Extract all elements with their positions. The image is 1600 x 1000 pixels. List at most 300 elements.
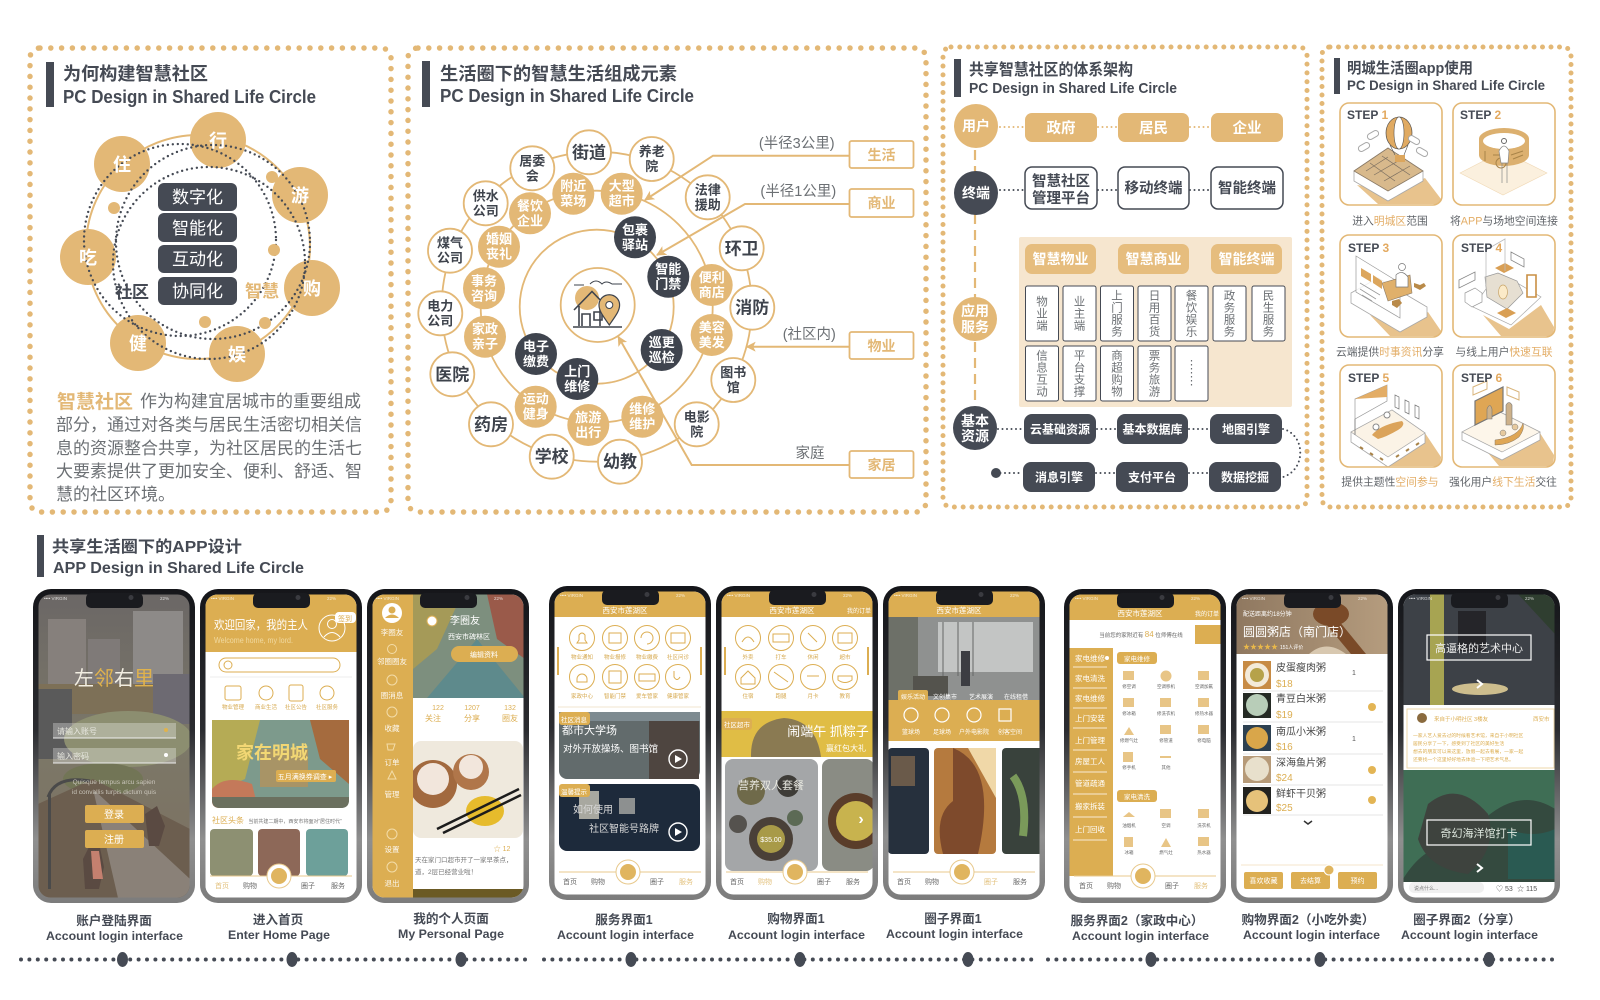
phone 8: shopping page 2: 去结算 [1300, 876, 1321, 885]
middle ring services: 出行 [575, 425, 601, 440]
phone 6: circle page 1 [883, 586, 1045, 900]
comment card: 来自于小明社区 3楼友 [1434, 715, 1489, 723]
arrows and labels: service categories: (半径1公里) [760, 183, 836, 200]
food menu list: $16 [1276, 742, 1293, 753]
service tags and icons: 其他 [1162, 764, 1171, 771]
phone 9: circle page 2: ♡ 53 [1496, 885, 1513, 893]
application services block [953, 244, 1285, 401]
heading: smart life elements [422, 61, 694, 107]
outer ring services: 药房 [474, 415, 508, 434]
diagram: seven elements ring: 住 [113, 155, 131, 175]
service tags and icons: 修热水器 [1195, 710, 1213, 717]
diagram: seven elements ring: 游 [291, 185, 309, 206]
middle ring services: 咨询 [471, 288, 497, 303]
phone 3: personal page: 管理 [384, 789, 400, 799]
phone 7: service page 2: 首页 [1079, 881, 1093, 890]
comment card: 西安市 [1533, 715, 1550, 723]
phone 8: shopping page 2: 喜欢收藏 [1250, 876, 1278, 885]
text block: smart community description: 作为构建宜居城市的重要组成 [140, 392, 361, 411]
heading: system architecture: PC Design in Shared Life Circle [969, 80, 1177, 97]
application services block: 娱 [1186, 312, 1198, 326]
step 6 card [1453, 365, 1555, 467]
service tags and icons: 冰箱 [1124, 849, 1134, 856]
phone 6: circle page 1: 艺术展演 [969, 693, 993, 701]
application services block: 物 [1036, 294, 1048, 308]
application services block: 餐 [1186, 288, 1198, 302]
heading: app usage: 明城生活圈app使用 [1347, 59, 1473, 77]
phone captions: 账户登陆界面 [76, 913, 152, 928]
phone 2: home page: Welcome home, my lord. [214, 636, 293, 645]
outer ring services: 幼教 [603, 453, 637, 472]
heading: why smart community: PC Design in Shared Life Circle [63, 87, 316, 107]
inner ring services: 维修 [564, 379, 590, 394]
phone 3: personal page: 天在家门口超市开了一家早茶点， [415, 855, 512, 864]
step captions: 与线上用户快速互联 [1455, 345, 1553, 359]
application services block: 游 [1149, 386, 1161, 398]
service tags and icons: 家电维修 [1124, 654, 1150, 663]
phone 7: service page 2: 圈子 [1165, 882, 1179, 890]
icon grid: 健康管家 [667, 692, 689, 700]
icon grid: 住宿 [742, 692, 754, 700]
phone 2: home page: 22% [327, 596, 336, 601]
phone 4: service page 1: 圈子 [650, 878, 664, 886]
inner ring services: 门禁 [655, 277, 681, 292]
phone 5: shopping page 1: •••• VIRGIN [727, 593, 750, 598]
middle ring services: 美发 [699, 335, 725, 350]
application services block: 业 [1036, 308, 1048, 320]
text block: smart community description: 大要素提供了更加安全、便利、舒适、智 [56, 462, 362, 481]
step captions: 将APP与场地空间连接 [1450, 214, 1558, 228]
phone 3: personal page: 1207 [464, 705, 480, 712]
phone 2: home page: 当前共建二期中，西安市将面对“居住时代” [248, 818, 342, 825]
phone 7: service page 2: 购物 [1107, 881, 1121, 890]
application services block: 政 [1224, 288, 1236, 302]
phone 7: service page 2: 搬家拆装 [1075, 801, 1105, 811]
phone 7: service page 2: 家电清洗 [1075, 673, 1105, 683]
food menu list [1243, 661, 1383, 824]
phone 1: login screen: 登录 [104, 808, 124, 821]
step 3 card: STEP 3 [1348, 241, 1389, 255]
text block: smart community description: 部分，通过对各类与居民生活密切相关信 [56, 416, 362, 434]
phone 4: service page 1 [549, 586, 711, 900]
bottom nav [210, 875, 352, 877]
icon grid: 物业通知 [571, 653, 593, 661]
inner ring services [515, 216, 689, 400]
phone 6: circle page 1: 户外电影院 [959, 728, 989, 736]
outer ring services: 医院 [435, 364, 469, 384]
step 1 card: STEP 1 [1347, 108, 1388, 122]
middle ring services: 维修 [629, 402, 655, 417]
phone 7: service page 2: 我的订单 [1195, 610, 1219, 618]
phone 1: login screen: Quisque tempus arcu sapien [73, 779, 156, 786]
phone captions: My Personal Page [398, 929, 504, 941]
phone 6: circle page 1: 服务 [1013, 877, 1027, 886]
phone 9: circle page 2: 奇幻海洋馆打卡 [1440, 826, 1518, 840]
phone captions: 我的个人页面 [413, 911, 489, 926]
phone 7: service page 2: 服务 [1194, 881, 1208, 890]
middle ring services: 大型 [609, 179, 635, 194]
application services block: 乐 [1186, 326, 1198, 338]
step 4 card [1453, 235, 1555, 337]
phone 4: service page 1: 购物 [591, 877, 605, 886]
phone 4: service page 1: 西安市莲湖区 [602, 605, 648, 615]
phone 2: home page [200, 589, 362, 903]
icon row [222, 685, 338, 711]
phone 3: personal page: 关注 [425, 713, 441, 723]
service tags and icons: 修电脑 [1197, 737, 1211, 744]
phone captions: Account login interface [1401, 930, 1538, 942]
outer ring services: 养老 [639, 144, 665, 159]
middle ring services: 运动 [523, 392, 549, 407]
phone 4: service page 1: 22% [676, 593, 685, 598]
phone 7: service page 2: 家电维修 [1075, 653, 1105, 663]
diagram: seven elements ring: 健 [129, 334, 147, 354]
diagram: seven elements ring: 行 [209, 131, 227, 151]
application services block: 信 [1036, 350, 1048, 362]
service tags and icons: 空调 [1162, 822, 1171, 829]
application services block: 货 [1149, 324, 1160, 338]
panel: system architecture [943, 47, 1307, 507]
phone captions: Account login interface [728, 930, 865, 942]
phone 6: circle page 1: 足球场 [933, 728, 951, 736]
comment card: 还要找一个这里好好地去体验一下吧艺术气息。 [1413, 756, 1514, 763]
middle ring services: 家政 [472, 322, 498, 337]
phone 9: circle page 2: ☆ 115 [1517, 884, 1537, 893]
phone 7: service page 2 [1064, 589, 1226, 903]
icon row: 社区服务 [316, 703, 338, 711]
phone 7: service page 2: 房屋工人 [1075, 756, 1105, 766]
phone 5: shopping page 1: 西安市莲湖区 [770, 605, 815, 615]
food menu list: 皮蛋瘦肉粥 [1276, 661, 1326, 674]
food menu list: 鲜虾干贝粥 [1276, 787, 1326, 800]
heading: smart life elements: PC Design in Shared Life Circle [440, 86, 694, 106]
application services block: 购 [1111, 372, 1123, 386]
basic resources rows: 消息引擎 [1035, 470, 1083, 484]
user row: 用户 [962, 118, 990, 134]
service tags and icons: 修管道 [1159, 737, 1173, 744]
video cards [559, 712, 700, 851]
step 3 card [1340, 235, 1442, 337]
heading: app design: APP Design in Shared Life Circle [53, 560, 304, 577]
food menu list: 深海鱼片粥 [1276, 756, 1326, 769]
phone 6: circle page 1: 购物 [925, 877, 939, 886]
middle ring services: 维护 [629, 417, 655, 432]
heading: app design: 共享生活圈下的APP设计 [52, 537, 242, 556]
arrows and labels: service categories [618, 135, 914, 478]
service tags and icons: 修手机 [1122, 764, 1136, 771]
phone 2: home page: 服务 [331, 881, 345, 890]
phone captions: 服务界面1 [595, 912, 653, 927]
application services block: 撑 [1074, 384, 1086, 398]
phone 5: shopping page 1: 首页 [730, 877, 744, 886]
middle ring services: 事务 [471, 273, 497, 288]
phone 3: personal page: 退出 [384, 878, 400, 888]
phone 7: service page 2: 上门回收 [1075, 824, 1105, 834]
outer ring services: 院 [690, 424, 703, 439]
diagram: seven elements ring: 智能化 [172, 219, 223, 238]
outer ring services: 援助 [695, 197, 721, 212]
outer ring services: 学校 [535, 447, 569, 467]
phone 1: login screen: id convallis turpis dictum quis [72, 789, 157, 796]
phone 7: service page 2: 家电维修 [1075, 693, 1105, 703]
phone 2: home page: 购物 [243, 881, 257, 890]
middle ring services: 超市 [609, 194, 635, 209]
icon grid: 家政中心 [571, 692, 593, 700]
phone 3: personal page: 分享 [464, 713, 480, 723]
application services block: 动 [1036, 386, 1048, 398]
icon row: 商业生活 [255, 703, 277, 711]
text block: smart community description: 息的资源整合共享，为社区居民的生活七 [56, 439, 362, 458]
inner ring services: 上门 [564, 364, 590, 379]
outer ring services: 院 [645, 159, 658, 174]
phone 8: shopping page 2: •••• VIRGIN [1242, 596, 1265, 601]
application services block: 用 [1149, 302, 1160, 314]
phone 5: shopping page 1: 闹端午 抓粽子 [787, 724, 869, 739]
panel: app usage steps [1322, 47, 1571, 507]
step 2 card: STEP 2 [1460, 108, 1501, 122]
heading: why smart community: 为何构建智慧社区 [63, 63, 208, 84]
terminal row: 智能终端 [1218, 179, 1276, 197]
service tags and icons: 修空调 [1122, 683, 1136, 690]
icon grid: 超市 [839, 653, 851, 661]
food menu list: 1 [1352, 736, 1356, 743]
phone captions: Account login interface [46, 931, 183, 943]
icon row: 社区公告 [285, 703, 307, 711]
middle ring services: 餐饮 [517, 198, 543, 213]
phone captions: Account login interface [557, 930, 694, 942]
diagram: seven elements ring: 互动化 [172, 250, 223, 269]
phone 6: circle page 1: 娱乐活动 [901, 693, 925, 701]
phone 3: personal page: 西安市碑林区 [448, 632, 490, 641]
phone 5: shopping page 1: 营养双人套餐 [738, 778, 804, 792]
phone 9: circle page 2: 高逼格的艺术中心 [1435, 641, 1523, 655]
food menu list: $19 [1276, 710, 1293, 721]
outer ring services: 公司 [473, 203, 499, 218]
phone 3: personal page: 收藏 [384, 723, 400, 733]
application services block: 智慧物业 [1032, 251, 1088, 267]
text block: smart community description: 慧的社区环境。 [56, 485, 175, 504]
middle ring services: 旅游 [575, 410, 601, 425]
heading: system architecture: 共享智慧社区的体系架构 [969, 60, 1133, 79]
phone 1: login screen: 左邻右里 [74, 667, 154, 690]
banner illustration: 五月满换券调查 ▸ [278, 772, 333, 781]
application services block: 百 [1149, 314, 1160, 326]
video cards: 温馨提示 [561, 787, 588, 796]
outer ring services: 会 [526, 168, 539, 183]
phone 2: home page: 圈子 [301, 882, 315, 890]
outer ring services: 煤气 [437, 236, 463, 251]
phone 1: login screen: 输入密码 [57, 751, 89, 761]
peach background: application services [1019, 237, 1292, 407]
phone 6: circle page 1: 22% [1010, 593, 1019, 598]
application services block: 务 [1263, 324, 1275, 338]
phone 6: circle page 1: 文创集市 [933, 693, 957, 701]
basic resources rows: 基本 [961, 413, 989, 429]
phone 6: circle page 1: 篮球场 [902, 728, 920, 736]
service tags and icons: 油烟机 [1122, 822, 1136, 829]
arrows and labels: service categories: (半径3公里) [759, 135, 835, 152]
middle ring services: 美容 [699, 320, 725, 335]
phone captions: 服务界面2（家政中心） [1071, 913, 1203, 928]
arrows and labels: service categories: 物业 [868, 338, 896, 354]
text block: smart community description [56, 390, 362, 504]
application services block: 务 [1111, 324, 1123, 338]
application services block: 服 [1111, 314, 1123, 326]
phone 1: login screen: 22% [160, 596, 169, 601]
diagram: seven elements ring: 协同化 [172, 282, 223, 301]
food menu list: $24 [1276, 773, 1293, 784]
step captions: 提供主题性空间参与 [1341, 475, 1439, 489]
outer ring services: 街道 [572, 142, 606, 162]
application services block: 超 [1111, 360, 1123, 374]
application services block: 服 [1263, 314, 1275, 326]
basic resources rows [953, 406, 1282, 492]
icon grid: 物业报修 [604, 653, 626, 661]
terminal row: 管理平台 [1032, 189, 1090, 207]
diagram: seven elements ring: 数字化 [172, 188, 223, 207]
banner illustration: 家在明城 [236, 742, 308, 763]
phone 1: login screen: 请输入账号 [57, 726, 97, 736]
outer ring services: 法律 [695, 182, 721, 197]
service tags and icons: 洗衣机 [1197, 822, 1211, 829]
phone 5: shopping page 1: 服务 [846, 877, 860, 886]
video cards: 社区消息 [561, 715, 588, 724]
phone 4: service page 1: 首页 [563, 877, 577, 886]
inner ring services: 巡检 [649, 350, 675, 365]
phone 7: service page 2: 上门管理 [1075, 735, 1105, 745]
outer ring services: 电影 [684, 409, 710, 424]
phone 8: shopping page 2: 预约 [1350, 876, 1364, 885]
icon grid: 跑腿 [775, 692, 787, 700]
application services block: 智慧商业 [1126, 251, 1182, 267]
inner ring services: 缴费 [523, 354, 549, 369]
inner ring services: 智能 [655, 262, 681, 277]
application services block: 民 [1263, 290, 1274, 302]
terminal row: 移动终端 [1124, 179, 1182, 197]
application services block: 日 [1149, 290, 1160, 302]
phone 2: home page: 首页 [215, 881, 229, 890]
service tags and icons: 修冰箱 [1122, 710, 1136, 717]
phone 3: personal page: 订单 [384, 757, 400, 767]
application services block: 智能终端 [1218, 251, 1274, 267]
application services block: 物 [1111, 384, 1123, 398]
phone captions: 购物界面2（小吃外卖） [1242, 912, 1374, 927]
diagram: seven elements ring: 智慧 [245, 281, 279, 301]
outer ring services: 馆 [727, 380, 740, 395]
phone 3: personal page: 圈消息 [381, 690, 404, 700]
outer ring services: 供水 [473, 188, 499, 203]
middle ring services: 健身 [523, 407, 549, 422]
phone captions: Account login interface [1072, 931, 1209, 943]
icon grid: 月卡 [807, 692, 819, 700]
application services block: 饮 [1186, 302, 1198, 314]
application services block: 上 [1111, 290, 1123, 302]
application services block: 端 [1074, 320, 1085, 332]
phone 2: home page: 社区头条 [212, 815, 244, 825]
phone 3: personal page: 22% [494, 596, 503, 601]
phone 9: circle page 2: 22% [1525, 596, 1534, 601]
phone 3: personal page: 设置 [384, 844, 400, 854]
phone 5: shopping page 1: 圈子 [817, 878, 831, 886]
middle ring services: 便利 [699, 270, 725, 285]
service tags and icons: 热水器 [1197, 849, 1211, 856]
step 4 card: STEP 4 [1461, 241, 1502, 255]
phone 6: circle page 1: 西安市莲湖区 [936, 605, 982, 615]
arrows and labels: service categories: 家居 [868, 457, 896, 473]
middle ring services: 亲子 [472, 337, 498, 352]
text block: smart community description: 智慧社区 [57, 390, 133, 413]
heading: app usage [1334, 58, 1545, 94]
phone 3: personal page: 122 [432, 705, 444, 712]
phone captions: 圈子界面2（分享） [1413, 912, 1521, 927]
phone 5: shopping page 1: › [858, 811, 864, 828]
application services block: 息 [1036, 360, 1048, 374]
service tags and icons [1117, 652, 1213, 856]
phone 3: personal page: 李圈友 [381, 627, 404, 637]
step 5 card [1340, 365, 1442, 467]
phone 8: shopping page 2: 圆圆粥店（南门店） [1243, 624, 1351, 639]
phone 6: circle page 1: 创客空间 [998, 728, 1022, 736]
phone 3: personal page: 编辑资料 [470, 650, 498, 659]
application services block: 服 [1224, 314, 1236, 326]
service tags and icons: 家电清洗 [1124, 792, 1150, 801]
phone 7: service page 2: 西安市莲湖区 [1118, 608, 1163, 618]
icon grid: 爱车管家 [636, 692, 658, 700]
start dot [991, 468, 1001, 478]
phone 5: shopping page 1: 22% [843, 593, 852, 598]
phone 5: shopping page 1 [716, 586, 884, 900]
icon grid: 教育 [839, 692, 851, 700]
phone 8: shopping page 2: ★★★★★ 151人评价 [1243, 643, 1303, 651]
application services block: 端 [1036, 320, 1048, 332]
application services block: 务 [1224, 324, 1236, 338]
phone 1: login screen [33, 589, 195, 903]
heading: smart life elements: 生活圈下的智慧生活组成元素 [440, 63, 677, 84]
basic resources rows: 基本数据库 [1122, 422, 1183, 436]
phone 2: home page: •••• VIRGIN [211, 596, 234, 601]
food menu list: $18 [1276, 679, 1293, 690]
phone 3: personal page: ☆ 12 [494, 844, 510, 853]
middle ring services: 菜场 [560, 194, 586, 209]
phone 3: personal page: 圈友 [502, 713, 518, 723]
diagram: seven elements ring [60, 112, 340, 382]
basic resources rows: 数据挖掘 [1221, 470, 1269, 484]
video cards: 对外开放操场、图书馆 [563, 743, 658, 755]
step 5 card: STEP 5 [1348, 371, 1389, 385]
phone 7: service page 2: •••• VIRGIN [1075, 596, 1098, 601]
bottom dotted timeline [21, 952, 1558, 967]
inner ring services: 驿站 [622, 237, 648, 252]
diagram: seven elements ring: 社区 [115, 282, 149, 302]
basic resources rows: 云基础资源 [1030, 422, 1090, 436]
comment card: 想去的朋友可以来这里，放假一起去看展，一家一起 [1413, 748, 1524, 755]
phone 5: shopping page 1: 社区超市 [724, 720, 750, 729]
application services block: 应用 [961, 303, 989, 319]
phone 7: service page 2: 当前您的家附近有 84 位师傅在线 [1099, 630, 1183, 639]
icon grid [570, 626, 690, 700]
service tags and icons: 空调移机 [1157, 683, 1175, 690]
phone 7: service page 2: 管道疏通 [1075, 778, 1105, 788]
step captions: 云端提供时事资讯分享 [1336, 345, 1444, 359]
outer ring services [418, 130, 774, 484]
heading: app design [37, 535, 304, 577]
phone 6: circle page 1: 圈子 [984, 878, 998, 886]
icon grid [736, 626, 858, 700]
user row: 政府 [1046, 119, 1076, 137]
diagram: seven elements ring: 购 [303, 279, 321, 299]
middle ring services: 丧礼 [486, 247, 512, 262]
phone 1: login screen: 注册 [104, 833, 124, 846]
